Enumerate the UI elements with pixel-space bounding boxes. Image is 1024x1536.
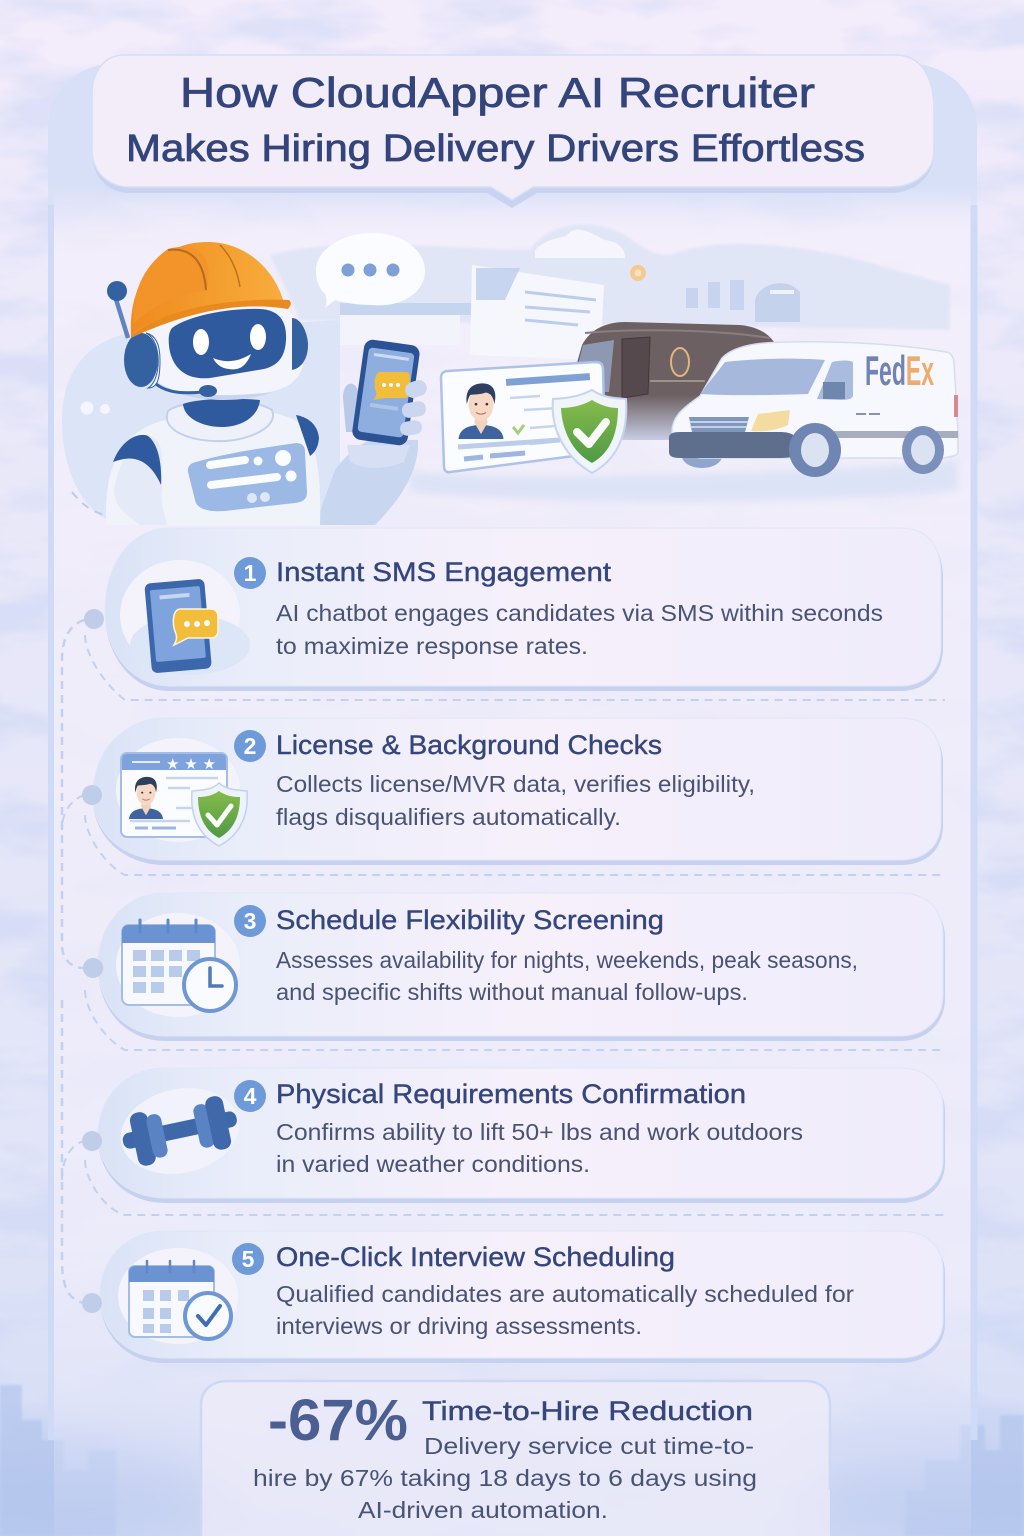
robot antenna [107, 281, 128, 338]
panel: time-to-hire result [201, 1381, 830, 1536]
result heading: Time-to-Hire Reduction [422, 1396, 753, 1426]
step 4 body: Confirms ability to lift 50+ lbs and work outdoors [276, 1119, 803, 1145]
step 3 heading: Schedule Flexibility Screening [276, 905, 664, 935]
icon: calendar and check [118, 1248, 238, 1344]
speech bubble [316, 233, 425, 308]
badge 3 [234, 905, 266, 937]
title [126, 69, 865, 170]
step 1 body [276, 600, 883, 659]
robot [106, 242, 429, 525]
step 3 body [276, 947, 858, 1005]
icon: calendar and clock [116, 913, 240, 1017]
result body: Delivery service cut time-to- [424, 1433, 754, 1459]
step 2 body: flags disqualifiers automatically. [276, 804, 621, 830]
skyline left and right [0, 1385, 1024, 1536]
title: How CloudApper AI Recruiter [180, 69, 815, 116]
front wheel far side [682, 444, 722, 468]
badge 5: 5 [242, 1246, 255, 1272]
panel: title bubble [92, 55, 934, 208]
step 2 body [276, 771, 755, 830]
badge 4 [234, 1080, 266, 1112]
icon: license and shield: ★★★ [166, 756, 216, 773]
robot helmet [131, 242, 291, 338]
panel: step 5 [82, 1231, 945, 1363]
connector dot [84, 609, 104, 629]
license card and shield [441, 362, 626, 473]
step 4 heading: Physical Requirements Confirmation [276, 1079, 746, 1109]
step 4 body: in varied weather conditions. [276, 1151, 590, 1177]
connector dot [83, 958, 103, 978]
connector dot [82, 1293, 102, 1313]
badge 3: 3 [244, 908, 256, 934]
robot body [106, 399, 320, 525]
badge 2: 2 [244, 733, 256, 759]
step 5 heading: One-Click Interview Scheduling [276, 1242, 675, 1272]
background documents and city [470, 265, 800, 360]
robot head [132, 302, 305, 400]
step 5 body [276, 1281, 854, 1339]
phone chat bubble [373, 372, 410, 400]
robot headset [124, 318, 308, 397]
icon: dumbbell [113, 1077, 247, 1185]
panel: step 3 [83, 893, 945, 1041]
step 2 body: Collects license/MVR data, verifies eligibility, [276, 771, 755, 797]
connector dot [82, 1131, 102, 1151]
title: Makes Hiring Delivery Drivers Effortless [126, 128, 865, 170]
brown delivery truck [568, 322, 776, 440]
connector dot [82, 785, 102, 805]
robot fingers [399, 378, 429, 437]
step 3 body: and specific shifts without manual follow-ups. [276, 979, 748, 1005]
badge 1: 1 [244, 560, 257, 586]
connector line [62, 620, 945, 1303]
badge 5 [232, 1243, 264, 1275]
chest panel [188, 443, 307, 511]
step 1 heading: Instant SMS Engagement [276, 557, 612, 587]
hero backdrop [62, 224, 958, 525]
badge 2 [234, 730, 266, 762]
badge 1 [234, 557, 266, 589]
white delivery van [669, 342, 958, 477]
step 1 body: to maximize response rates. [276, 633, 588, 659]
result body [253, 1433, 757, 1523]
phone [351, 339, 421, 446]
big stat: -67% [268, 1388, 408, 1453]
icon: license and shield [116, 738, 247, 846]
panel: step 2 [82, 718, 943, 865]
robot arm and hand [315, 384, 418, 525]
result body: AI-driven automation. [358, 1497, 608, 1523]
result body: hire by 67% taking 18 days to 6 days using [253, 1465, 757, 1491]
panel: step 4 [82, 1068, 945, 1203]
step 5 body: Qualified candidates are automatically scheduled for [276, 1281, 854, 1307]
van wheels [789, 423, 944, 477]
panel: step 1 [84, 528, 943, 691]
step 5 body: interviews or driving assessments. [276, 1313, 642, 1339]
step 3 body: Assesses availability for nights, weekends, peak seasons, [276, 947, 858, 973]
icon: phone with chat [120, 560, 250, 675]
step 1 body: AI chatbot engages candidates via SMS within seconds [276, 600, 883, 626]
step 4 body [276, 1119, 803, 1177]
FedEx logo: FedEx [865, 347, 934, 394]
step 2 heading: License & Background Checks [276, 730, 662, 760]
panel: hero illustration [62, 224, 958, 525]
badge 4: 4 [244, 1083, 257, 1109]
